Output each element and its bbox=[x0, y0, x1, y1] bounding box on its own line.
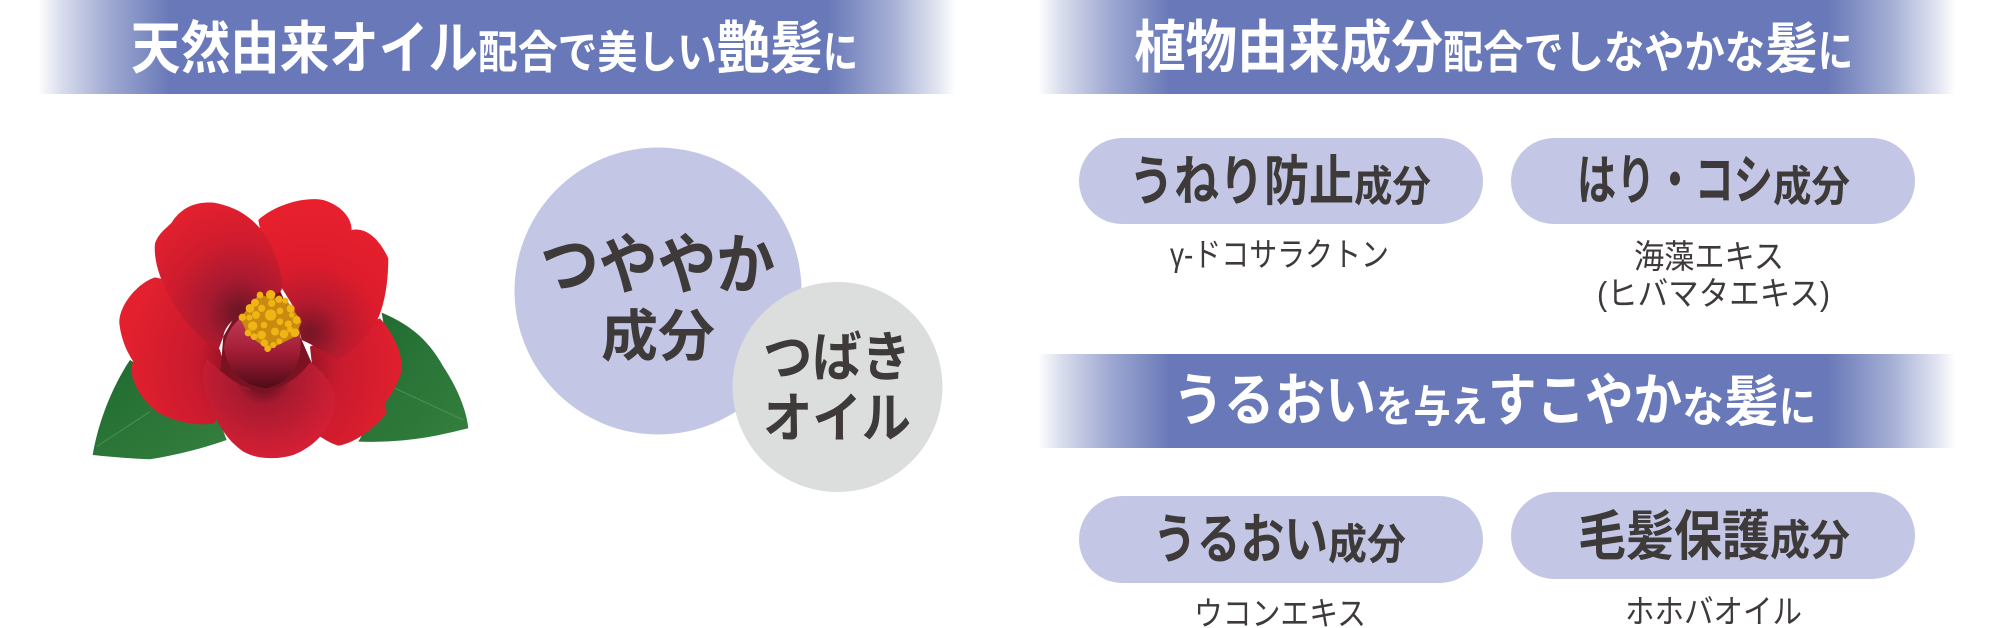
heading: plant-derived: 髪 bbox=[1765, 18, 1818, 80]
pill: hair protection ingredient: 毛髪保護 bbox=[1578, 507, 1770, 567]
heading: moisture: すこやか bbox=[1488, 369, 1682, 433]
circle: camellia oil: オイル bbox=[763, 389, 911, 449]
heading: plant-derived: 植物由来成分 bbox=[1134, 16, 1443, 80]
pill: firmness ingredient: はり・コシ bbox=[1577, 151, 1773, 211]
circle: camellia oil: つばき bbox=[763, 328, 911, 388]
header band: moisture bbox=[1038, 354, 1955, 448]
pill: moisture ingredient: うるおい bbox=[1153, 510, 1328, 570]
heading: plant-derived bbox=[1134, 16, 1853, 80]
heading: plant-derived: に bbox=[1818, 26, 1853, 77]
heading: natural oil: 艶髪 bbox=[717, 17, 823, 81]
caption: seaweed extract: (ヒバマタエキス) bbox=[1597, 275, 1830, 312]
header band: plant-derived bbox=[1038, 0, 1955, 94]
caption: seaweed extract: 海藻エキス bbox=[1634, 238, 1784, 275]
heading: moisture: に bbox=[1779, 384, 1816, 432]
caption: seaweed extract bbox=[1597, 238, 1830, 312]
heading: natural oil bbox=[131, 17, 858, 81]
pill: hair protection ingredient bbox=[1511, 492, 1915, 579]
pill: firmness ingredient bbox=[1511, 138, 1915, 224]
label: glossy: つややか bbox=[540, 228, 775, 302]
pill: anti-frizz ingredient: 成分 bbox=[1354, 163, 1431, 210]
heading: moisture: を与え bbox=[1376, 384, 1488, 432]
heading: moisture bbox=[1173, 369, 1816, 433]
caption: gamma-docosalactone: γ-ドコサラクトン bbox=[1170, 236, 1389, 273]
heading: plant-derived: 配合でしなやかな bbox=[1443, 27, 1765, 78]
pill: firmness ingredient: 成分 bbox=[1773, 163, 1850, 210]
pill: hair protection ingredient: 成分 bbox=[1770, 517, 1850, 564]
heading: moisture: な bbox=[1682, 384, 1724, 432]
heading: natural oil: 配合で美しい bbox=[478, 27, 717, 78]
heading: natural oil: に bbox=[823, 27, 858, 78]
pill: anti-frizz ingredient bbox=[1079, 138, 1483, 224]
pill: moisture ingredient bbox=[1079, 496, 1483, 583]
heading: natural oil: 天然由来オイル bbox=[131, 17, 478, 81]
pill: moisture ingredient: 成分 bbox=[1328, 521, 1406, 568]
icon: camellia flower with leaves bbox=[93, 199, 468, 459]
circle: camellia oil bbox=[732, 282, 942, 492]
heading: moisture: うるおい bbox=[1173, 369, 1376, 433]
circle: glossy ingredient bbox=[514, 148, 802, 434]
label: ingredient: 成分 bbox=[601, 305, 715, 368]
heading: moisture: 髪 bbox=[1724, 371, 1779, 433]
header band: natural oil bbox=[38, 0, 955, 94]
pill: anti-frizz ingredient: うねり防止 bbox=[1129, 152, 1354, 212]
